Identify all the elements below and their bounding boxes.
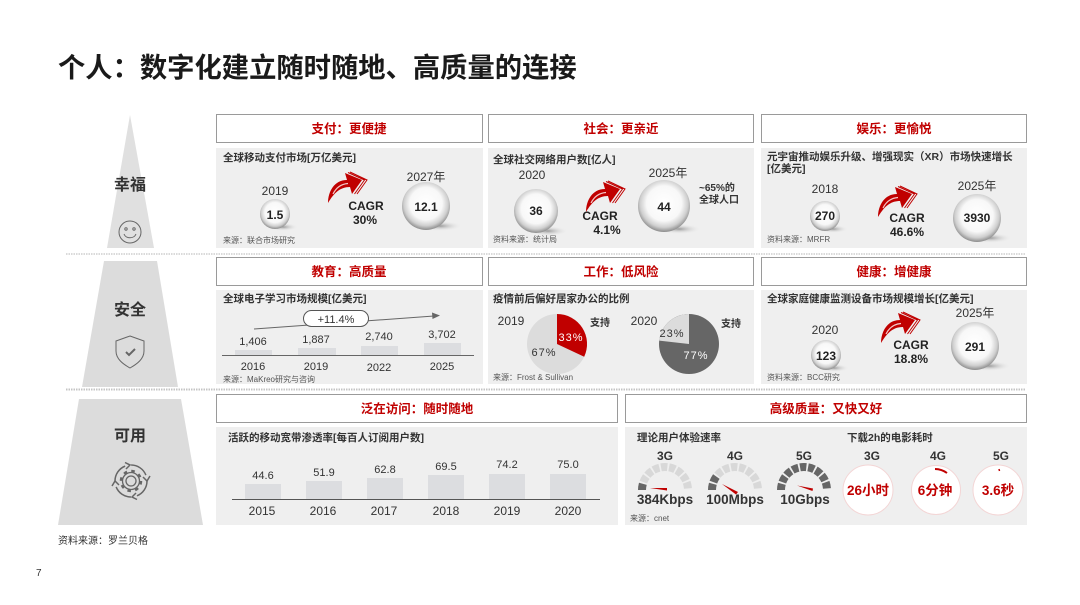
panel: 社会: 4.1%: [593, 223, 621, 237]
bar chart: 74.2: [496, 459, 518, 471]
panel header: 健康: 健康：增健康: [856, 264, 932, 279]
panel: 健康: [761, 258, 1027, 384]
panel: 健康: 资料来源：BCC研究: [767, 372, 840, 382]
panel: 工作: [488, 258, 754, 384]
bar chart: 75.0: [557, 459, 579, 471]
panel header: 工作: [488, 258, 754, 286]
panel: 泛在访问: [216, 394, 618, 525]
panel header: 支付: [216, 114, 482, 142]
pyramid tier: 幸福: [107, 115, 154, 248]
panel header: 社会: [488, 114, 754, 142]
bar chart: 62.8: [374, 464, 396, 476]
icon: smiley: [119, 221, 141, 243]
panel: 社会: [488, 114, 754, 248]
panel header: 高级质量: [626, 394, 1026, 422]
panel: 高级质量: 来源：cnet: [630, 514, 670, 523]
download time: 5G: 5G: [993, 449, 1009, 463]
pie chart: 2019: [498, 314, 610, 374]
download time: 5G: 3.6秒: [982, 483, 1015, 498]
bubble: 2020: 123: [816, 349, 836, 363]
bar chart: 2,740: [365, 331, 393, 343]
pie chart: 2020: 支持: [721, 317, 741, 330]
bubble: 2025: 44: [657, 200, 671, 214]
bubble: 2020: 36: [529, 204, 543, 218]
pyramid tier: 幸福: 幸福: [114, 176, 146, 194]
panel: 支付: 2027年: [407, 170, 445, 184]
bar chart: 2025: [430, 361, 454, 373]
gauge: 4G: 100Mbps: [706, 492, 764, 507]
panel: 高级质量: [625, 394, 1027, 525]
bar chart: 2019: [494, 504, 521, 518]
panel header: 泛在访问: [216, 394, 618, 422]
panel: 娱乐: 资料来源：MRFR: [767, 234, 830, 244]
bar chart: [222, 329, 474, 374]
panel header: 支付: 支付：更便捷: [311, 121, 387, 136]
bar chart: 2017: [371, 504, 398, 518]
panel header: 教育: 教育：高质量: [311, 264, 387, 279]
gauge: 4G: [706, 449, 764, 507]
bubble: 2025: [638, 180, 701, 234]
bar chart: 1,887: [302, 334, 330, 346]
pie chart: 2020: 23%: [659, 328, 685, 340]
panel: 社会: 2025年: [649, 166, 687, 180]
pie chart: 2020: 2020: [631, 314, 658, 328]
panel: 工作: 来源：Frost & Sullivan: [493, 373, 573, 382]
pie chart: 2019: 67%: [531, 347, 557, 359]
pyramid tier: 安全: [82, 261, 178, 387]
panel header: 泛在访问: 泛在访问：随时随地: [361, 401, 474, 416]
bubble: 2020: [514, 189, 568, 236]
panel: 社会: 2020: [519, 168, 546, 182]
bar chart: 2016: [310, 504, 337, 518]
panel header: 工作: 工作：低风险: [583, 264, 659, 279]
bubble: 2019: 1.5: [267, 208, 284, 222]
row divider: upper: [66, 253, 1025, 255]
pyramid tier: 可用: 可用: [114, 428, 146, 445]
download time: 3G: [843, 449, 893, 515]
bar chart: 2022: [367, 362, 391, 374]
download time: 3G: 3G: [864, 449, 880, 463]
panel: 健康: 全球家庭健康监测设备市场规模增长[亿美元]: [767, 292, 974, 305]
panel header: 健康: [762, 258, 1026, 286]
download time: 4G: 4G: [930, 449, 946, 463]
panel header: 娱乐: [762, 114, 1026, 142]
callout: ~65%的: [699, 181, 735, 194]
bar chart: 51.9: [313, 467, 335, 479]
footnote: source: 资料来源：罗兰贝格: [58, 534, 148, 547]
bubble: 2025: 3930: [964, 211, 991, 225]
download time: 5G: [973, 449, 1023, 515]
bar chart: [232, 459, 600, 518]
bar chart: 2016: [241, 361, 265, 373]
icon: gear with arrows: [112, 462, 150, 500]
panel header: 高级质量: 高级质量：又快又好: [770, 401, 883, 416]
panel: 高级质量: 理论用户体验速率: [637, 431, 721, 444]
panel: 健康: 2025年: [956, 306, 994, 320]
icon: shield: [116, 336, 144, 368]
gauge: 5G: 10Gbps: [780, 492, 830, 507]
gauge: 4G: 4G: [727, 449, 743, 463]
gauge: 3G: 384Kbps: [637, 492, 693, 507]
panel: 工作: 疫情前后偏好居家办公的比例: [493, 292, 630, 305]
row divider: lower: [66, 388, 1025, 390]
panel: 支付: CAGR: [348, 199, 384, 213]
bar chart: 1,406: [239, 336, 267, 348]
bubble: 2025: [951, 322, 1011, 371]
title: 个人：数字化建立随时随地、高质量的连接: [58, 52, 577, 83]
arrow: [878, 186, 917, 217]
panel header: 娱乐: 娱乐：更愉悦: [856, 121, 932, 136]
pie chart: 2020: 77%: [683, 350, 709, 362]
panel: 支付: [216, 114, 483, 248]
panel: 社会: CAGR: [582, 209, 618, 223]
pie chart: 2019: 2019: [498, 314, 525, 328]
pyramid tier: 安全: 安全: [114, 300, 146, 319]
panel: 泛在访问: 活跃的移动宽带渗透率[每百人订阅用户数]: [228, 431, 424, 444]
gauge: 3G: [637, 449, 693, 507]
panel: 教育: [216, 258, 483, 384]
panel: 娱乐: 46.6%: [890, 225, 924, 239]
gauge: 3G: 3G: [657, 449, 673, 463]
download time: 4G: [912, 449, 960, 514]
panel: 娱乐: [亿美元]: [767, 162, 806, 175]
download time: 3G: 26小时: [847, 483, 890, 498]
arrow: [328, 172, 367, 203]
callout: [699, 181, 739, 206]
panel: 高级质量: 下载2h的电影耗时: [847, 431, 933, 444]
growth arrow: [254, 310, 440, 329]
download time: 4G: 6分钟: [918, 483, 952, 498]
bar chart: 2015: [249, 504, 276, 518]
panel header: 教育: [216, 258, 482, 286]
pie chart: 2019: 支持: [590, 316, 610, 329]
gauge: 5G: 5G: [796, 449, 812, 463]
bubble: 2020: [811, 340, 849, 372]
bar chart: 2018: [433, 504, 460, 518]
panel: 教育: 全球电子学习市场规模[亿美元]: [223, 292, 366, 305]
panel: 娱乐: 元宇宙推动娱乐升级、增强现实（XR）市场快速增长: [767, 150, 1013, 163]
panel: 健康: 18.8%: [894, 352, 928, 366]
bubble: 2019: [260, 199, 298, 231]
panel: 健康: CAGR: [893, 338, 929, 352]
bubble: 2018: 270: [815, 209, 835, 223]
panel: 娱乐: [761, 114, 1027, 248]
pie chart: 2020: [631, 314, 741, 374]
pyramid tier: 可用: [58, 399, 203, 525]
panel: 娱乐: 2018: [812, 182, 839, 196]
growth arrow: +11.4%: [318, 314, 355, 326]
panel: 支付: 30%: [353, 213, 377, 227]
callout: 全球人口: [699, 193, 739, 206]
bubble: 2025: [953, 194, 1012, 243]
bar chart: 2019: [304, 361, 328, 373]
panel: 社会: 全球社交网络用户数[亿人]: [493, 153, 616, 166]
pie chart: 2019: 33%: [558, 332, 584, 344]
panel: 健康: 2020: [812, 323, 839, 337]
arrow: [586, 181, 625, 212]
page number: 7: [36, 568, 42, 579]
bar chart: 69.5: [435, 461, 457, 473]
panel: 娱乐: CAGR: [889, 211, 925, 225]
bubble: 2027: [402, 182, 462, 231]
panel header: 社会: 社会：更亲近: [583, 121, 659, 136]
gauge: 5G: [780, 449, 830, 507]
bubble: 2025: 291: [965, 340, 985, 354]
bar chart: 3,702: [428, 329, 456, 341]
bar chart: 44.6: [252, 470, 274, 482]
bubble: 2018: [810, 201, 848, 233]
panel: 支付: 2019: [262, 184, 289, 198]
panel: 社会: 资料来源：统计局: [493, 234, 557, 244]
arrow: [881, 312, 920, 343]
panel: 教育: 来源：MaKreo研究与咨询: [223, 374, 315, 384]
panel: 支付: 全球移动支付市场[万亿美元]: [223, 151, 356, 164]
panel: 支付: 来源：联合市场研究: [223, 235, 295, 245]
bar chart: 2020: [555, 504, 582, 518]
panel: 娱乐: 2025年: [958, 179, 996, 193]
bubble: 2027: 12.1: [414, 200, 438, 214]
